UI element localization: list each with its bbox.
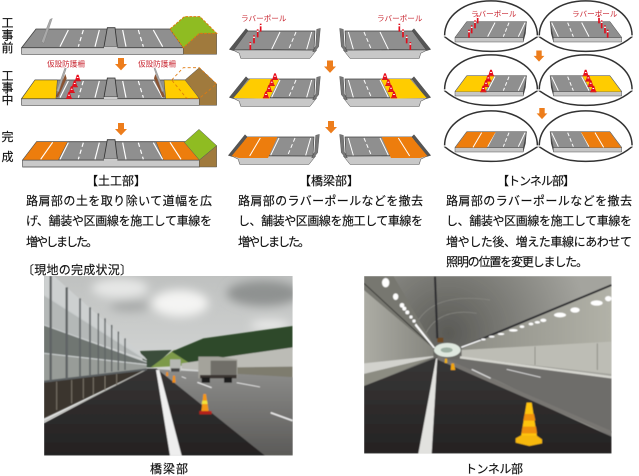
- arrow: tunnel step 2: [537, 108, 547, 119]
- label: tunnel rubber pole left: ラバーポール: [471, 10, 517, 18]
- description: tunnel: [446, 193, 632, 269]
- panel: earthwork diagrams: [22, 17, 217, 167]
- description: earthwork: 路肩部の土を取り除いて道幅を広: [26, 193, 212, 208]
- arrow: earthwork step 1: [115, 58, 127, 70]
- heading: tunnel: 【トンネル部】: [497, 174, 575, 188]
- description: tunnel: 増やした後、増えた車線にあわせて: [446, 234, 632, 249]
- description: bridge: [238, 193, 423, 249]
- label: during construction: 事: [2, 81, 14, 95]
- description: bridge: 路肩部のラバーポールなどを撤去: [238, 193, 423, 208]
- description: earthwork: [26, 193, 212, 249]
- heading: bridge: 【橋梁部】: [299, 173, 359, 188]
- diagram: tunnel during: [443, 56, 634, 104]
- label: rubber pole left: ラバーポール: [241, 14, 287, 23]
- description: tunnel: 路肩部のラバーポールなどを撤去: [446, 193, 632, 208]
- label: before construction: 前: [2, 40, 14, 55]
- label: before construction: 工: [2, 16, 14, 30]
- photo: bridge section: [44, 276, 300, 456]
- label: during construction: 工: [2, 69, 14, 83]
- diagram: earthwork completed: [23, 129, 217, 167]
- arrow: bridge step 1: [324, 60, 336, 73]
- label: tunnel rubber pole right: ラバーポール: [572, 10, 618, 18]
- stage labels: [2, 16, 14, 164]
- diagram: earthwork before: [22, 17, 217, 54]
- arrow: tunnel step 1: [534, 50, 544, 62]
- description: earthwork: 増やしました。: [26, 235, 98, 249]
- text block: earthwork: [26, 174, 212, 249]
- diagram: earthwork during: [22, 68, 217, 105]
- label: temporary guard fence right: 仮設防護柵: [138, 58, 176, 68]
- label: completed: 成: [2, 150, 14, 164]
- diagram: bridge during: [229, 73, 431, 106]
- diagram: bridge before: [229, 24, 431, 58]
- heading: site completion status: 〔現地の完成状況〕: [22, 262, 132, 277]
- arrow: earthwork step 2: [115, 123, 127, 135]
- text block: tunnel: [446, 174, 632, 269]
- description: tunnel: し、舗装や区画線を施工して車線を: [446, 213, 632, 228]
- heading: earthwork: 【土工部】: [86, 174, 146, 188]
- label: before construction: 事: [2, 28, 14, 42]
- photo: tunnel section: [364, 276, 612, 454]
- diagram: tunnel before: [443, 2, 634, 50]
- diagram: tunnel completed: [443, 112, 634, 160]
- label: temporary guard fence left: 仮設防護柵: [47, 58, 85, 68]
- arrow: bridge step 2: [325, 121, 337, 133]
- description: bridge: し、舗装や区画線を施工して車線を: [238, 213, 423, 228]
- label: rubber pole right: ラバーポール: [377, 14, 423, 23]
- caption: tunnel section: トンネル部: [465, 462, 523, 476]
- description: tunnel: 照明の位置を変更しました。: [446, 254, 588, 269]
- panel: tunnel diagrams: [443, 2, 634, 160]
- label: during construction: 中: [2, 92, 14, 107]
- caption: bridge section: 橋梁部: [150, 461, 188, 476]
- panel: bridge diagrams: [228, 14, 431, 164]
- description: bridge: 増やしました。: [238, 235, 310, 249]
- text block: bridge: [238, 173, 423, 249]
- description: earthwork: げ、舗装や区画線を施工して車線を: [26, 213, 212, 228]
- diagram: bridge completed: [228, 134, 431, 164]
- label: completed: 完: [2, 130, 14, 144]
